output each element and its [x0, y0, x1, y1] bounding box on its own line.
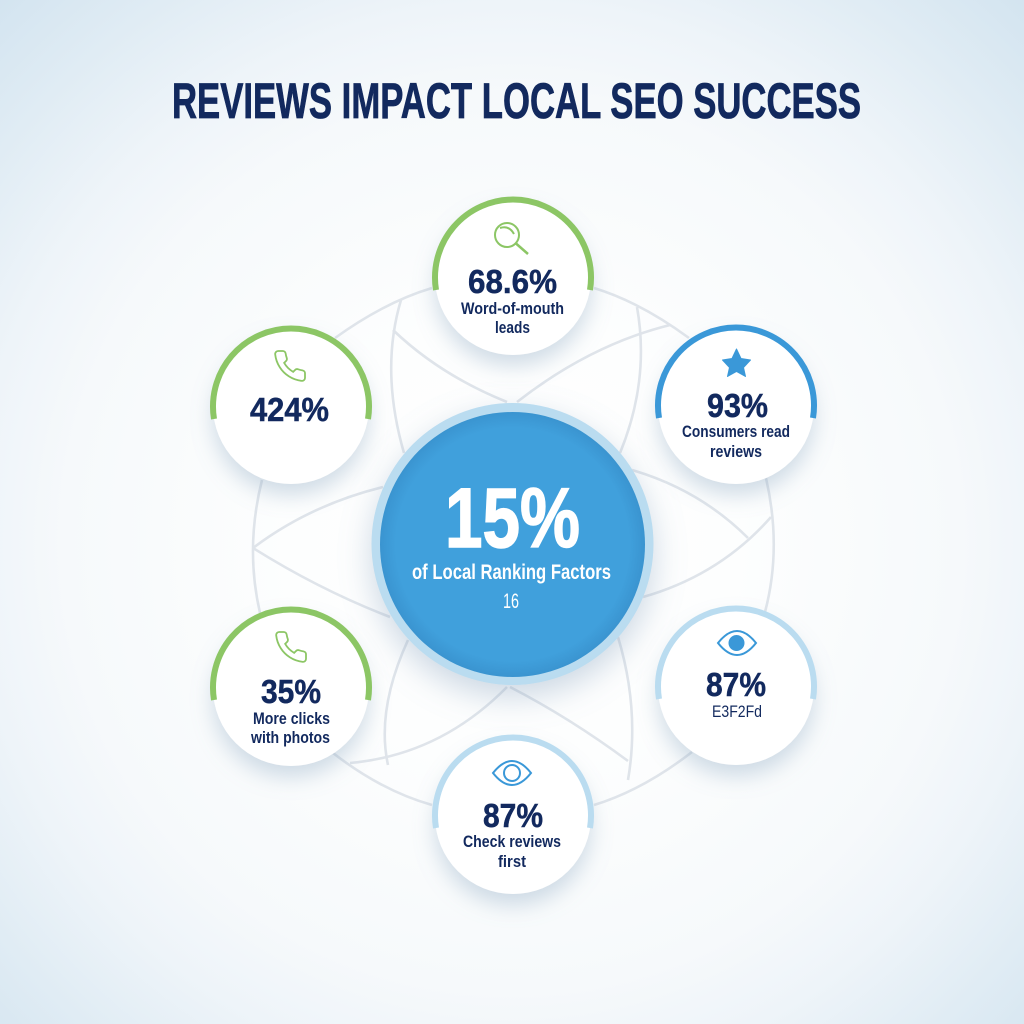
icon: eye outline — [493, 761, 531, 785]
node: 87% check reviews first: 87% — [483, 797, 543, 834]
node: 68.6% word-of-mouth leads: leads — [495, 319, 530, 337]
node: 87% check reviews first — [435, 738, 591, 894]
node: 68.6% word-of-mouth leads: Word-of-mouth — [461, 300, 564, 318]
icon: phone — [276, 632, 306, 662]
node: 87% E3F2Fd: 87% — [706, 666, 766, 703]
icon: eye filled — [718, 631, 756, 655]
node: 35% more clicks with photos: with photos — [250, 729, 330, 747]
node: 35% more clicks with photos — [213, 610, 369, 766]
central circle: 15% — [372, 403, 654, 685]
central circle: 15%: 15% — [445, 471, 580, 565]
network of connecting curves — [253, 288, 774, 805]
node: 87% E3F2Fd: E3F2Fd — [712, 703, 762, 721]
node: 87% check reviews first: Check reviews — [463, 833, 561, 851]
central circle: 15%: 16 — [503, 590, 519, 613]
node: 424% — [213, 328, 369, 484]
node: 68.6% word-of-mouth leads — [435, 199, 591, 355]
node: 93% consumers read reviews — [658, 328, 814, 484]
central circle: 15%: of Local Ranking Factors — [412, 561, 611, 584]
icon: magnifying glass — [495, 223, 528, 254]
node: 87% E3F2Fd — [658, 609, 814, 765]
node: 35% more clicks with photos: 35% — [261, 673, 321, 710]
icon: phone — [275, 351, 305, 381]
node: 68.6% word-of-mouth leads: 68.6% — [468, 263, 557, 300]
icon: star — [722, 349, 750, 376]
node: 35% more clicks with photos: More clicks — [253, 710, 330, 728]
node: 87% check reviews first: first — [498, 853, 526, 871]
node: 93% consumers read reviews: 93% — [707, 387, 768, 424]
node: 424%: 424% — [250, 391, 329, 428]
node: 93% consumers read reviews: reviews — [710, 443, 762, 461]
node: 93% consumers read reviews: Consumers read — [682, 423, 790, 441]
